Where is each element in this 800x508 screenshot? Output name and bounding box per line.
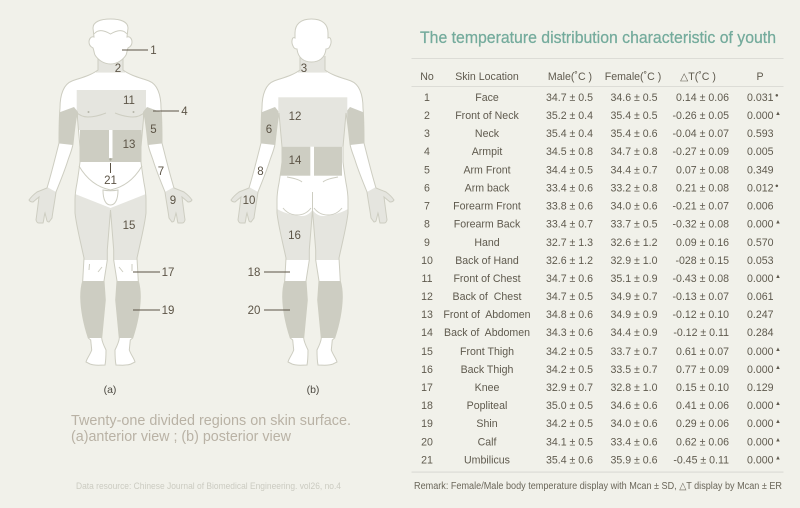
table rows: 33.5 ± 0.7 <box>610 364 658 376</box>
table rows: 32.9 ± 1.0 <box>610 255 658 267</box>
table rows: 34.6 ± 0.5 <box>610 92 658 104</box>
region numbers and leader lines: anterior: 5 <box>150 124 157 136</box>
table rows: 0.000 <box>747 400 774 412</box>
table rows: 0.129 <box>747 382 774 394</box>
table rows: ▲ <box>775 111 781 117</box>
table rows: 17 <box>421 382 433 394</box>
table rows: 35.4 ± 0.4 <box>546 128 593 140</box>
table rows: Back of Chest <box>453 291 522 303</box>
table rows: 0.000 <box>747 273 774 285</box>
table rows: Forearm Front <box>453 200 521 212</box>
label (b): (b) <box>307 384 319 396</box>
table rows: 34.2 ± 0.5 <box>546 346 593 358</box>
table rows: 0.284 <box>747 327 774 339</box>
table rows: 34.2 ± 0.5 <box>546 364 593 376</box>
table rows: Armpit <box>472 146 502 158</box>
table rows: 33.4 ± 0.6 <box>610 436 658 448</box>
title: The temperature distribution characteristic of youth <box>420 29 776 47</box>
region numbers and leader lines: anterior: 15 <box>123 220 135 232</box>
region numbers and leader lines: posterior: 8 <box>257 166 264 178</box>
table rows: Hand <box>474 237 500 249</box>
table rows: Arm Front <box>463 164 511 176</box>
table rows: 0.15 ± 0.10 <box>676 382 729 394</box>
region numbers and leader lines: posterior: 16 <box>288 230 301 242</box>
table rows: 32.6 ± 1.2 <box>610 237 658 249</box>
table rows: 34.7 ± 0.8 <box>610 146 658 158</box>
table rows: ▲ <box>775 438 781 444</box>
label (a): (a) <box>104 384 116 396</box>
table rows: Popliteal <box>467 400 507 412</box>
table rows: 33.7 ± 0.7 <box>610 346 658 358</box>
region numbers and leader lines: anterior <box>104 45 188 317</box>
table rows: 10 <box>421 255 433 267</box>
table rows: 33.4 ± 0.6 <box>546 182 593 194</box>
table header: P <box>756 71 764 83</box>
table rows: 0.07 ± 0.08 <box>676 164 729 176</box>
table rows: Arm back <box>465 182 510 194</box>
table rows: ▲ <box>775 347 781 353</box>
table rows: 35.4 ± 0.6 <box>546 454 593 466</box>
table rows: 2 <box>424 110 430 122</box>
table header: Skin Location <box>455 71 519 83</box>
region numbers and leader lines: anterior: 1 <box>150 45 157 57</box>
table rows: 3 <box>424 128 430 140</box>
table rows: 6 <box>424 182 430 194</box>
table rows: Knee <box>475 382 499 394</box>
table rows: 0.000 <box>747 364 774 376</box>
table rows: Front Thigh <box>460 346 514 358</box>
table rows: 33.4 ± 0.7 <box>546 218 593 230</box>
table rows: 7 <box>424 200 430 212</box>
table rows: 0.570 <box>747 237 774 249</box>
region numbers and leader lines: anterior: 21 <box>104 175 117 187</box>
remark: Remark: Female/Male body temperature display with Mcan ± SD, △T display by Mcan ± ER <box>414 481 782 492</box>
table rows: 32.9 ± 0.7 <box>546 382 593 394</box>
region numbers and leader lines: posterior: 6 <box>266 124 272 136</box>
table rows: Neck <box>475 128 500 140</box>
table rows: 0.247 <box>747 309 774 321</box>
table rows: 8 <box>424 218 430 230</box>
table rows: 34.9 ± 0.9 <box>610 309 658 321</box>
table rows: 0.031 <box>747 92 774 104</box>
table rows: Shin <box>476 418 498 430</box>
region numbers and leader lines: posterior: 12 <box>289 111 301 123</box>
table rows: 0.005 <box>747 146 774 158</box>
table header: Female(˚C ) <box>605 71 661 83</box>
region numbers and leader lines: posterior <box>243 63 307 317</box>
table rows: 0.000 <box>747 218 774 230</box>
caption <box>71 412 351 445</box>
table rows: 0.593 <box>747 128 774 140</box>
table rows: -028 ± 0.15 <box>675 255 729 267</box>
region numbers and leader lines: posterior: 14 <box>289 155 302 167</box>
table rows: 5 <box>424 164 430 176</box>
table rules <box>412 58 784 473</box>
data source: Data resource: Chinese Journal of Biomedical Engineering. vol26, no.4 <box>76 481 341 492</box>
table rows: 35.1 ± 0.9 <box>610 273 658 285</box>
table rows: Back Thigh <box>461 364 514 376</box>
table rows: Front of Neck <box>455 110 519 122</box>
table rows <box>421 92 781 466</box>
table header: Male(˚C ) <box>548 71 592 83</box>
table rows: 34.2 ± 0.5 <box>546 418 593 430</box>
table rows: 0.29 ± 0.06 <box>676 418 729 430</box>
region numbers and leader lines: anterior: 2 <box>115 63 121 75</box>
table rows: 33.7 ± 0.5 <box>610 218 658 230</box>
region numbers and leader lines: anterior: 11 <box>123 95 135 107</box>
table rows: 35.2 ± 0.4 <box>546 110 593 122</box>
table rows: 0.000 <box>747 418 774 430</box>
table header: △T(˚C ) <box>680 71 716 83</box>
table rows: Face <box>475 92 499 104</box>
table rows: 34.4 ± 0.5 <box>546 164 593 176</box>
caption: Twenty-one divided regions on skin surface. <box>71 412 351 429</box>
table rows: 0.14 ± 0.06 <box>676 92 729 104</box>
table rows: -0.12 ± 0.11 <box>673 327 729 339</box>
table rows: ▲ <box>775 456 781 462</box>
table rows: ▲ <box>775 274 781 280</box>
table rows: 34.0 ± 0.6 <box>610 200 658 212</box>
figure (b): posterior view <box>222 19 403 365</box>
table rows: Forearm Back <box>454 218 521 230</box>
region numbers and leader lines: anterior: 7 <box>158 166 164 178</box>
table rows: 13 <box>421 309 433 321</box>
region numbers and leader lines: anterior: 9 <box>170 195 176 207</box>
table rows: 20 <box>421 436 433 448</box>
table rows: 33.2 ± 0.8 <box>610 182 658 194</box>
table rows: 0.006 <box>747 200 774 212</box>
table rows: 0.000 <box>747 454 774 466</box>
table rows: -0.43 ± 0.08 <box>673 273 729 285</box>
table rows: Front of Abdomen <box>443 309 531 321</box>
table rows: 34.5 ± 0.8 <box>546 146 593 158</box>
table rows: ● <box>775 184 779 190</box>
table rows: 0.62 ± 0.06 <box>676 436 729 448</box>
table rows: 34.4 ± 0.7 <box>610 164 658 176</box>
region numbers and leader lines: posterior: 18 <box>248 267 260 279</box>
table rows: ▲ <box>775 419 781 425</box>
table rows: 0.000 <box>747 110 774 122</box>
table rows: 9 <box>424 237 430 249</box>
table rows: 35.4 ± 0.6 <box>610 128 658 140</box>
table rows: ▲ <box>775 220 781 226</box>
table rows: 4 <box>424 146 430 158</box>
table rows: 34.7 ± 0.5 <box>546 291 593 303</box>
table rows: -0.27 ± 0.09 <box>673 146 729 158</box>
table rows: 16 <box>421 364 433 376</box>
table rows: Front of Chest <box>453 273 521 285</box>
table rows: 12 <box>421 291 433 303</box>
table rows: 34.9 ± 0.7 <box>610 291 658 303</box>
table rows: 0.21 ± 0.08 <box>676 182 729 194</box>
table rows: -0.04 ± 0.07 <box>673 128 729 140</box>
region numbers and leader lines: anterior: 13 <box>123 139 135 151</box>
region numbers and leader lines: anterior: 19 <box>162 305 174 317</box>
table rows: 0.000 <box>747 346 774 358</box>
table rows: -0.13 ± 0.07 <box>673 291 729 303</box>
table rows: 0.09 ± 0.16 <box>676 237 729 249</box>
table rows: 0.053 <box>747 255 774 267</box>
table rows: 1 <box>424 92 430 104</box>
table rows: 34.6 ± 0.6 <box>610 400 658 412</box>
table rows: 32.7 ± 1.3 <box>546 237 593 249</box>
table rows: 32.8 ± 1.0 <box>610 382 658 394</box>
table rows: 0.77 ± 0.09 <box>676 364 729 376</box>
table rows: Back of Abdomen <box>444 327 530 339</box>
table rows: ▲ <box>775 365 781 371</box>
table rows: -0.12 ± 0.10 <box>673 309 729 321</box>
table rows: 15 <box>421 346 433 358</box>
table rows: 0.061 <box>747 291 774 303</box>
region numbers and leader lines: anterior: 17 <box>162 267 174 279</box>
table rows: 35.0 ± 0.5 <box>546 400 593 412</box>
table rows: Back of Hand <box>455 255 519 267</box>
table rows: 18 <box>421 400 433 412</box>
table rows: 34.7 ± 0.5 <box>546 92 593 104</box>
table rows: 0.41 ± 0.06 <box>676 400 729 412</box>
figure (a): anterior view <box>20 19 201 365</box>
table rows: 0.61 ± 0.07 <box>676 346 729 358</box>
table rows: -0.32 ± 0.08 <box>673 218 729 230</box>
region numbers and leader lines: anterior: 4 <box>181 106 188 118</box>
table rows: 34.0 ± 0.6 <box>610 418 658 430</box>
table rows: 0.000 <box>747 436 774 448</box>
table rows: -0.21 ± 0.07 <box>673 200 729 212</box>
table rows: ▲ <box>775 401 781 407</box>
table rows: 34.3 ± 0.6 <box>546 327 593 339</box>
table rows: 21 <box>421 454 433 466</box>
region numbers and leader lines: posterior: 3 <box>301 63 307 75</box>
table rows: 33.8 ± 0.6 <box>546 200 593 212</box>
caption: (a)anterior view ; (b) posterior view <box>71 428 291 445</box>
table header: No <box>420 71 434 83</box>
table rows: 19 <box>421 418 433 430</box>
table rows: 35.4 ± 0.5 <box>610 110 658 122</box>
region numbers and leader lines: posterior: 20 <box>248 305 260 317</box>
table rows: 0.012 <box>747 182 774 194</box>
table rows: 34.1 ± 0.5 <box>546 436 593 448</box>
table rows: -0.26 ± 0.05 <box>673 110 729 122</box>
table header <box>420 71 764 83</box>
table rows: 11 <box>422 273 433 285</box>
table rows: 35.9 ± 0.6 <box>610 454 658 466</box>
table rows: ● <box>775 93 779 99</box>
region numbers and leader lines: posterior: 10 <box>243 195 255 207</box>
table rows: -0.45 ± 0.11 <box>673 454 729 466</box>
table rows: Calf <box>478 436 496 448</box>
table rows: 0.349 <box>747 164 774 176</box>
table rows: 34.8 ± 0.6 <box>546 309 593 321</box>
table rows: 34.7 ± 0.6 <box>546 273 593 285</box>
table rows: 14 <box>421 327 433 339</box>
table rows: 32.6 ± 1.2 <box>546 255 593 267</box>
table rows: Umbilicus <box>464 454 510 466</box>
table rows: 34.4 ± 0.9 <box>610 327 658 339</box>
